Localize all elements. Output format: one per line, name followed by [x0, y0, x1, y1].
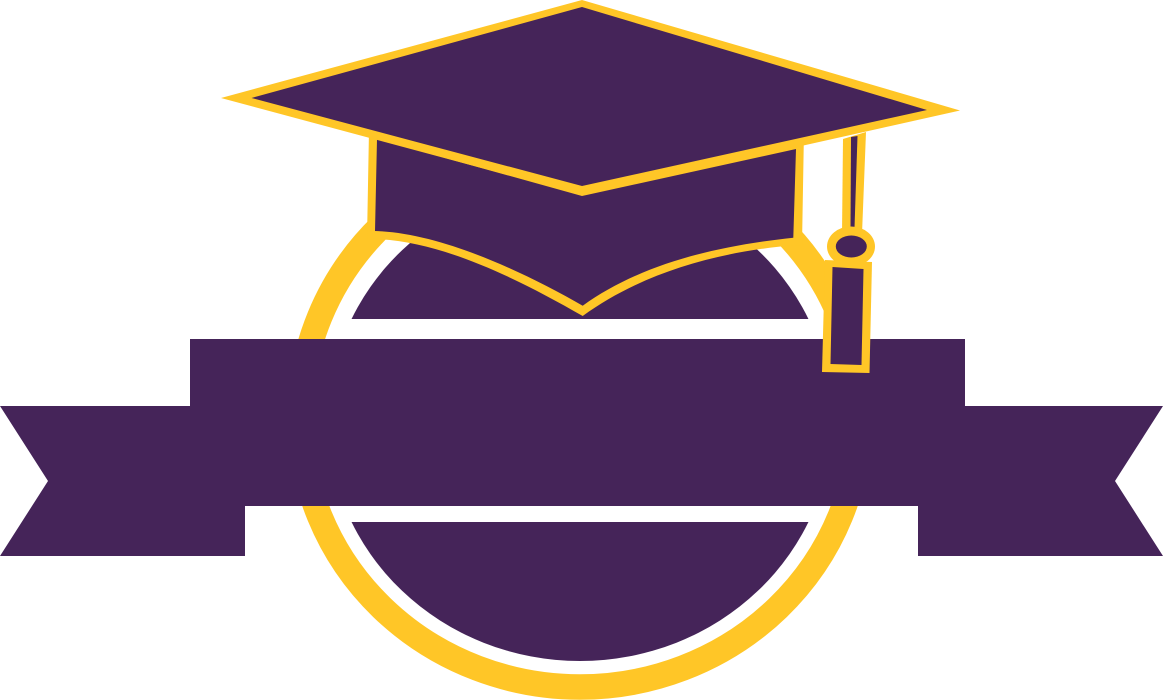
- cap band: [367, 130, 804, 316]
- icon: purple circle with horizontal gap: [352, 243, 808, 661]
- ribbon left tail: [0, 406, 245, 556]
- tassel: [822, 260, 872, 373]
- icon: gold circle ring: [300, 146, 860, 687]
- tassel knot: [827, 226, 875, 266]
- ribbon right tail: [918, 406, 1163, 556]
- ribbon main band: [190, 339, 965, 506]
- tassel cord: [842, 132, 866, 234]
- cap top board: [221, 0, 960, 195]
- ribbon banner: [0, 339, 1163, 556]
- graduation cap: [221, 0, 960, 373]
